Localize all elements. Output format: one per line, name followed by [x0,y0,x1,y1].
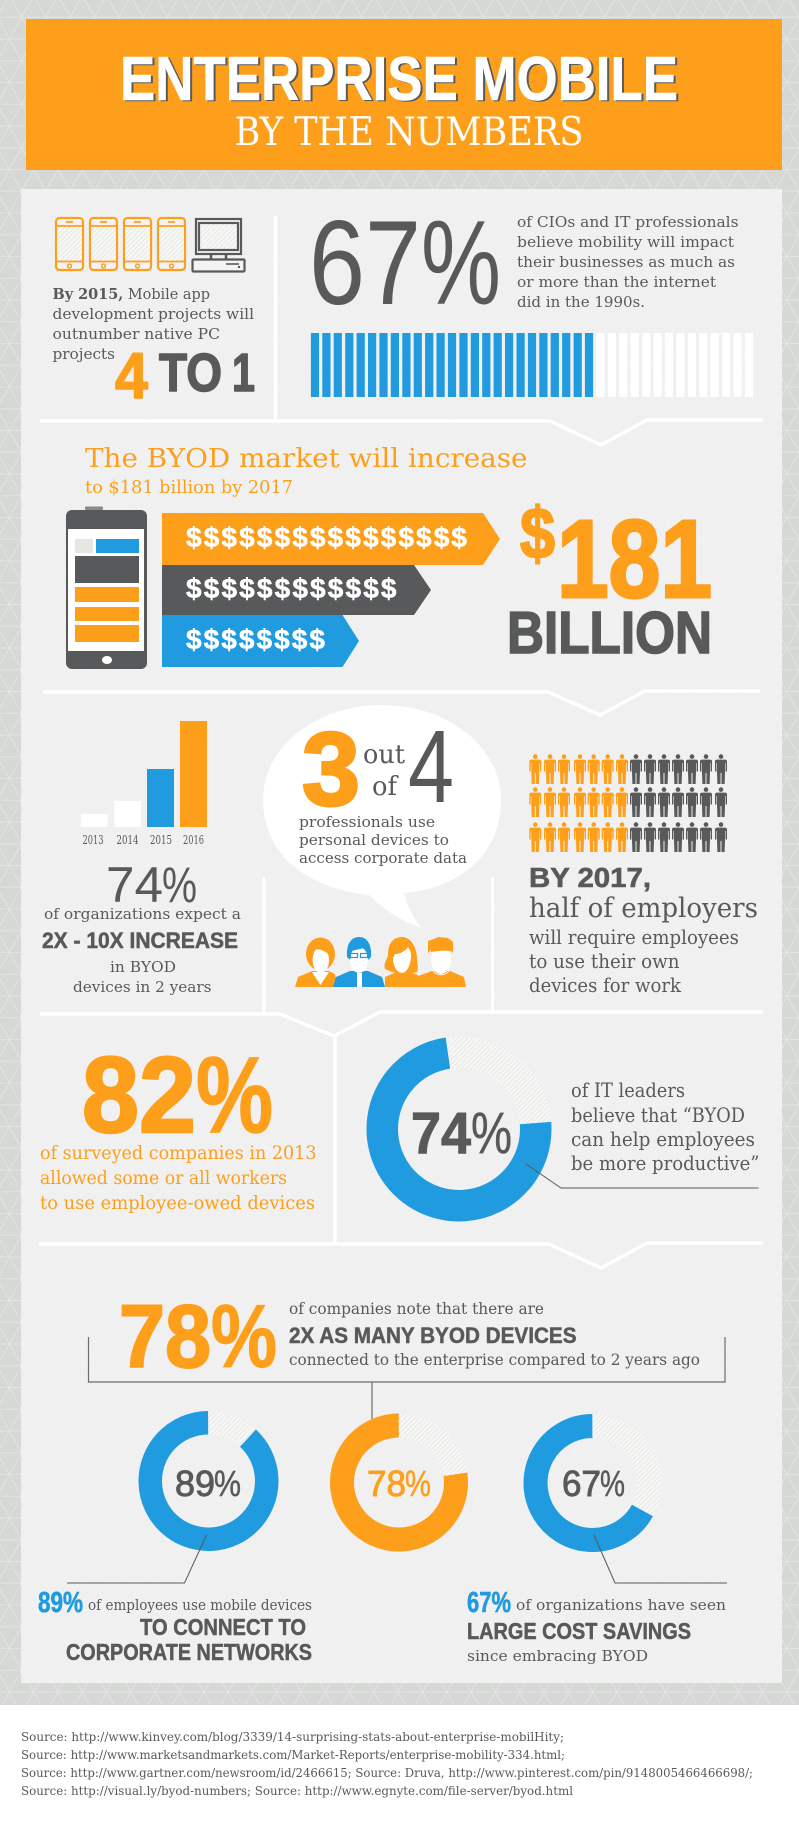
text: organizations expect increase: in BYOD [110,958,176,976]
chart: donut 78%: % [405,1463,431,1504]
text: 89% connect to corporate networks: TO CONNECT TO [140,1614,306,1640]
text: 2x as many BYOD devices: of companies note that there are [289,1300,544,1318]
subtitle: BY THE NUMBERS [234,110,584,155]
text: professionals use personal devices [299,813,467,867]
text: 2x as many BYOD devices: connected to the enterprise compared to 2 years ago [289,1351,700,1369]
heading: BYOD market: The BYOD market will increase [85,444,528,474]
text: 67% large cost savings [467,1587,726,1665]
text: 89% connect to corporate networks [38,1587,312,1665]
text: professionals use personal devices: personal devices to [299,831,449,849]
arrow bar: grey [162,565,431,615]
chart: donut 78% [335,1418,463,1547]
chart: bar chart 2013-2016: 2013 [82,833,104,847]
dividers: third row [264,877,492,1014]
stat: 3 out of 4: of [372,772,399,802]
stat: 4 to 1 [115,339,255,412]
divider [274,216,277,420]
text: mobile app projects: development projects will [52,305,254,323]
icon: four professionals [295,937,466,987]
chart: donut 67% [515,1406,670,1560]
stat: 3 out of 4 [302,709,454,828]
arrow bar: blue [162,615,359,667]
chart: people grid 14 by 3 [529,754,727,852]
stat: 82% [82,1034,273,1155]
text: by 2017 half of employers: BY 2017, [529,862,651,893]
chart: donut 89%: 89 [175,1463,215,1504]
stat: 4 to 1: 4 [115,339,148,412]
text: organizations expect increase [42,905,241,996]
text: professionals use personal devices: access corporate data [299,849,467,867]
stat: 67%: 67 [309,196,421,330]
stat: 3 out of 4: 3 [302,712,360,828]
chart: donut 74% [377,1047,541,1211]
arrow bar: orange [162,513,500,565]
stat: 74% organizations: 74 [106,857,163,913]
chart: 67% stripe bar [315,333,749,397]
text: CIOs [517,213,738,311]
bracket connector [88,1337,725,1429]
stat: $181 billion: $ [520,494,555,574]
footer: sources: Source: http://www.gartner.com/newsroom/id/2466615; Source: Druva, http://www.pinterest.com/pin/9148005466466698/; [21,1766,753,1780]
subheading: BYOD market: to $181 billion by 2017 [85,477,293,498]
text: mobile app projects: By 2015, Mobile app [52,285,210,303]
text: CIOs: did in the 1990s. [517,293,645,311]
stat: 74% organizations: % [162,857,197,913]
text: CIOs: believe mobility will impact [517,233,734,251]
text: mobile app projects [52,285,254,363]
stat: 78% companies: % [211,1286,277,1386]
text: 89% connect to corporate networks: 89% [38,1587,83,1619]
text: 67% large cost savings: 67% [467,1587,511,1619]
text: IT leaders: can help employees [571,1128,755,1151]
leader line: 67% donut [594,1535,727,1583]
text: by 2017 half of employers: devices for work [529,974,681,997]
icon: desktop computer [192,219,244,272]
stat: 82%: 82 [82,1034,196,1155]
speech bubble [263,705,501,928]
leader line: 89% donut [67,1535,206,1583]
text: 2x as many BYOD devices [289,1300,700,1369]
stat: 3 out of 4: 4 [408,709,454,824]
chart: donut 67%: % [600,1463,625,1504]
stat: 4 to 1: TO [159,343,222,403]
chart: bar chart 2013-2016: 2016 [183,833,204,847]
text: CIOs: of CIOs and IT professionals [517,213,738,231]
text: professionals use personal devices: professionals use [299,813,435,831]
footer: sources: Source: http://visual.ly/byod-numbers; Source: http://www.egnyte.com/file-server/byod.html [21,1784,573,1798]
text: 67% large cost savings: of organizations have seen [516,1596,726,1614]
chart: donut 74%: % [471,1101,512,1166]
title: ENTERPRISE MOBILE [120,45,678,114]
text: CIOs: their businesses as much as [517,253,735,271]
text: by 2017 half of employers: to use their own [529,950,680,973]
stat: 78% companies [119,1286,277,1386]
text: organizations expect increase: of organizations expect a [44,905,241,923]
person: woman curly hair [385,937,418,987]
footer: sources: Source: http://www.kinvey.com/blog/3339/14-surprising-stats-about-enterprise-mobilHity; [21,1730,564,1744]
panel: header [26,19,782,170]
chart: donut 89% [126,1399,291,1563]
person: woman short hair [295,938,338,987]
text: organizations expect increase: 2X - 10X INCREASE [42,928,238,953]
text: IT leaders: believe that “BYOD [571,1104,745,1127]
text: organizations expect increase: devices in 2 years [73,978,212,996]
text: by 2017 half of employers: half of employers [529,893,758,924]
chart: donut 67%: 67 [562,1463,601,1504]
text: mobile app projects: projects [52,345,115,363]
person: man spiky hair [418,937,466,987]
text: 89% connect to corporate networks: CORPORATE NETWORKS [66,1639,312,1665]
text: mobile app projects: outnumber native PC [52,325,220,343]
text: IT leaders: be more productive” [571,1152,760,1175]
stat: 67%: % [421,196,501,330]
text: by 2017 half of employers: will require employees [529,926,739,949]
text: 2x as many BYOD devices: 2X AS MANY BYOD DEVICES [289,1323,576,1348]
stat: $181 billion: 181 [557,498,712,621]
chart: donut 78%: 78 [367,1463,406,1504]
stat: 4 to 1: 1 [232,343,255,403]
divider chevron 2 [43,691,760,715]
person: man with glasses [333,937,385,987]
icon: smartphone [66,506,147,669]
text: IT leaders [571,1079,760,1175]
text: surveyed companies [40,1142,316,1214]
arrow bar: blue: $$$$$$$$ [186,624,325,655]
stat: 82%: % [196,1034,273,1155]
stat: 3 out of 4: out [363,740,406,770]
text: 89% connect to corporate networks: of employees use mobile devices [88,1596,312,1614]
text: surveyed companies: of surveyed companies in 2013 [40,1142,316,1164]
footer: sources [0,1705,799,1835]
chart: donut 74%: 74 [411,1101,471,1166]
chart: donut 89%: % [214,1463,241,1504]
text: surveyed companies: allowed some or all workers [40,1167,287,1189]
text: 67% large cost savings: since embracing BYOD [467,1647,648,1665]
divider chevron 3 [40,1012,763,1244]
icon: four phones [56,218,185,270]
chart: bar chart 2013-2016: 2014 [116,833,139,847]
divider chevron 1 [40,420,763,445]
stat: 78% companies: 78 [119,1286,211,1386]
text: CIOs: or more than the internet [517,273,716,291]
leader line: 74% donut [526,1164,758,1188]
text: surveyed companies: to use employee-owed devices [40,1192,315,1214]
stat: $181 billion: BILLION [507,600,712,666]
stat: 74% organizations [106,857,197,913]
text: 67% large cost savings: LARGE COST SAVINGS [467,1618,691,1644]
arrow bar: grey: $$$$$$$$$$$$ [186,573,397,604]
footer: sources: Source: http://www.marketsandmarkets.com/Market-Reports/enterprise-mobility-334.html; [21,1748,565,1762]
text: by 2017 half of employers [529,862,758,997]
stat: $181 billion [507,494,712,666]
chart: bar chart 2013-2016 [81,721,207,847]
text: IT leaders: of IT leaders [571,1079,685,1102]
arrow bar: orange: $$$$$$$$$$$$$$$$ [186,522,467,553]
chart: bar chart 2013-2016: 2015 [150,833,172,847]
divider chevron 4 [39,1243,763,1268]
panel: main content [21,189,782,1683]
stat: 67% [309,196,501,330]
